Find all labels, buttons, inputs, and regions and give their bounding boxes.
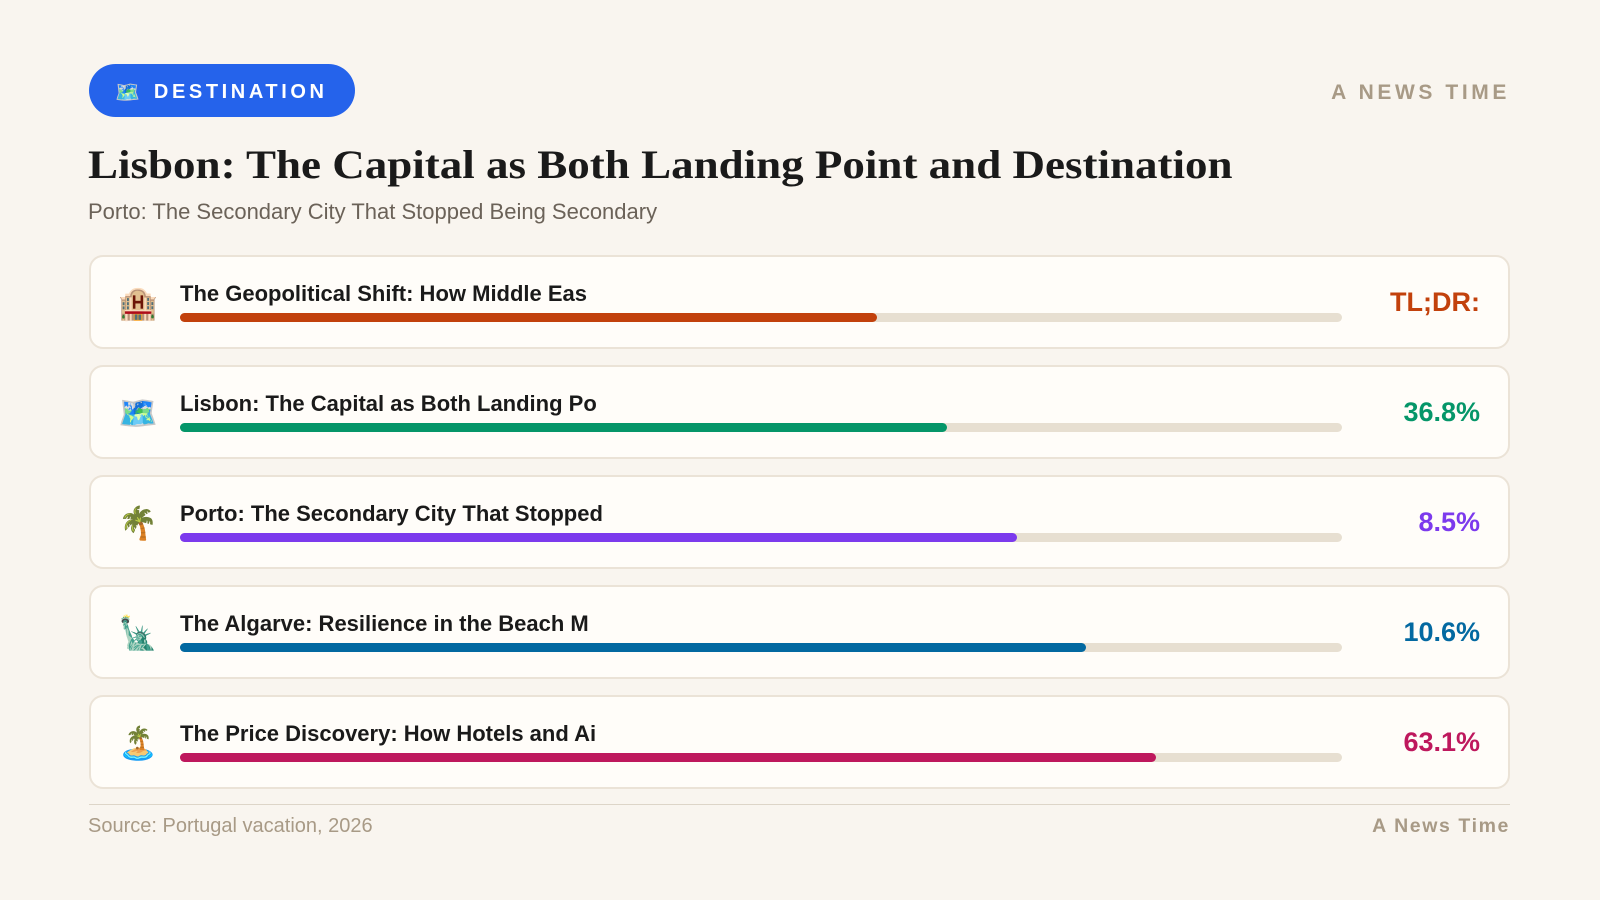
value: 10.6% bbox=[1403, 617, 1480, 647]
label: Porto: The Secondary City That Stopped bbox=[180, 501, 603, 526]
label: Lisbon: The Capital as Both Landing Po bbox=[180, 391, 597, 416]
value: TL;DR: bbox=[1390, 287, 1480, 317]
icon: palm: 🌴 bbox=[118, 504, 158, 542]
icon: map: 🗺️ bbox=[118, 394, 158, 432]
label: The Geopolitical Shift: How Middle Eas bbox=[180, 281, 587, 306]
bar bbox=[180, 423, 1342, 432]
bar bbox=[180, 533, 1342, 542]
label: The Price Discovery: How Hotels and Ai bbox=[180, 721, 596, 746]
panel: row 5 bbox=[89, 695, 1510, 789]
value: 8.5% bbox=[1418, 507, 1480, 537]
badge: destination bbox=[89, 64, 355, 117]
panel: row 4 bbox=[89, 585, 1510, 679]
badge: destination: 🗺️ bbox=[115, 82, 140, 104]
value: 63.1% bbox=[1403, 727, 1480, 757]
value: 36.8% bbox=[1403, 397, 1480, 427]
subtitle: Porto: The Secondary City That Stopped Being Secondary bbox=[88, 199, 657, 224]
icon: hotel: 🏨 bbox=[118, 284, 158, 322]
title: Lisbon: The Capital as Both Landing Point and Destination bbox=[88, 142, 1232, 187]
bar bbox=[180, 643, 1342, 652]
footer brand: A News Time bbox=[1372, 815, 1510, 837]
badge: destination: DESTINATION bbox=[154, 80, 328, 102]
source: Source: Portugal vacation, 2026 bbox=[88, 815, 373, 837]
panel: row 1 bbox=[89, 255, 1510, 349]
brand: A NEWS TIME bbox=[1331, 81, 1510, 104]
bar bbox=[180, 753, 1342, 762]
label: The Algarve: Resilience in the Beach M bbox=[180, 611, 589, 636]
panel: row 3 bbox=[89, 475, 1510, 569]
icon: statue: 🗽 bbox=[118, 614, 158, 652]
icon: island: 🏝️ bbox=[118, 724, 158, 762]
bar bbox=[180, 313, 1342, 322]
panel: row 2 bbox=[89, 365, 1510, 459]
